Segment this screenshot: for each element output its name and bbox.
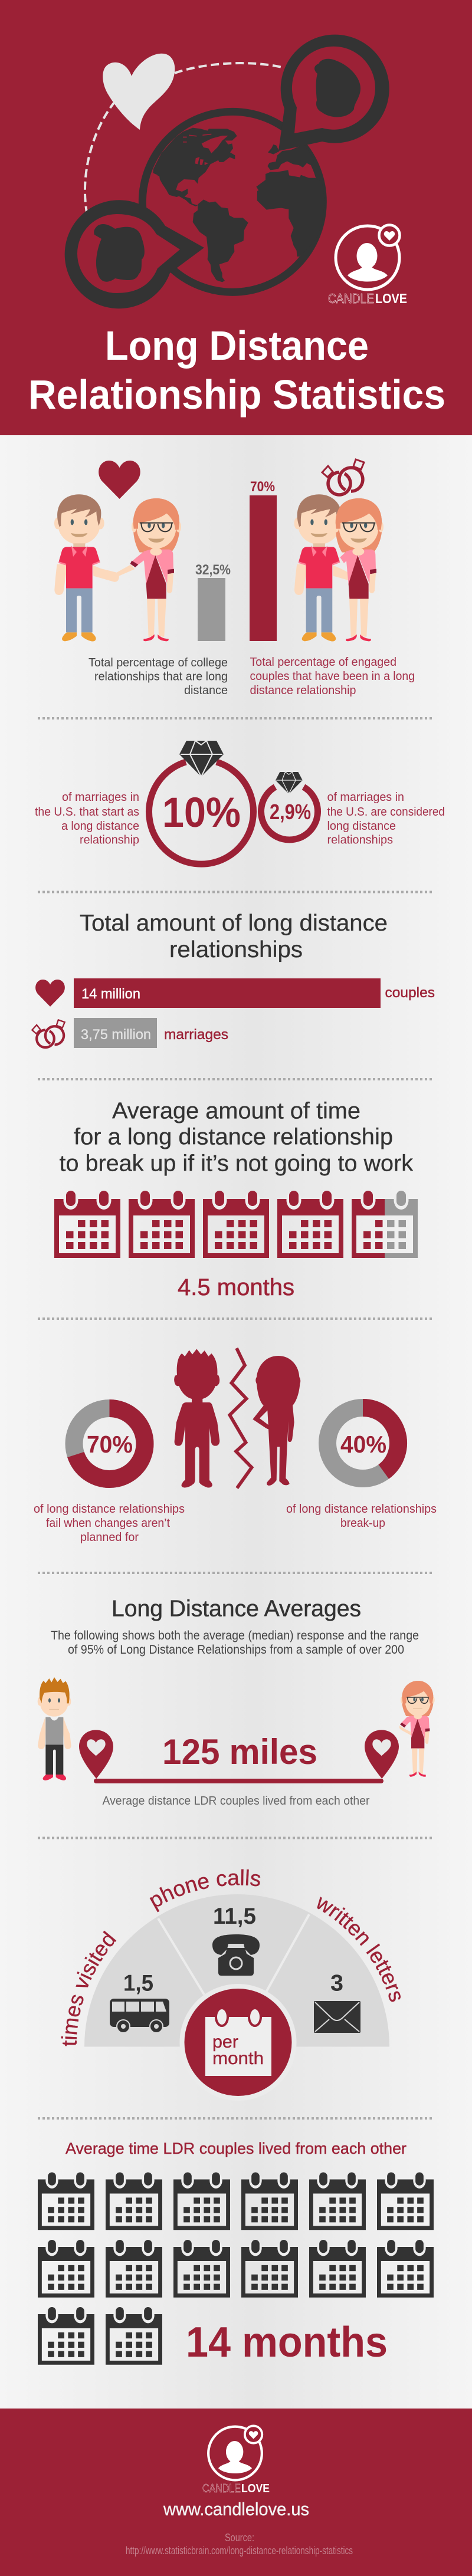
- logo: [328, 225, 407, 306]
- bar: 70%: 70%: [250, 479, 275, 495]
- title: Relationship Statistics: [28, 372, 445, 418]
- dashed flight path: [85, 63, 284, 212]
- text: college relationships: Total percentage of college: [88, 656, 228, 669]
- small man: [38, 1677, 71, 1780]
- logo: LOVE: [375, 291, 407, 306]
- panel: total amount: [32, 911, 435, 1048]
- calendars: 4.5 months: [54, 1191, 418, 1258]
- source: http://www.statisticbrain.com/long-distance-relationship-statistics: [126, 2545, 353, 2557]
- distance line: [94, 1779, 384, 1783]
- icon: wedding rings: [32, 1020, 65, 1047]
- donut: 70%: 70%: [87, 1431, 133, 1458]
- icon: wedding rings: [322, 459, 364, 495]
- icon: envelope: [314, 2001, 360, 2033]
- text: marriages considered long distance: [327, 790, 445, 847]
- intro text: The following shows both the average (median) response and the range: [51, 1629, 419, 1642]
- footer logo: LOVE: [241, 2482, 270, 2495]
- text: marriages start as long distance: a long distance: [61, 819, 139, 833]
- big ring 10%: 10%: [162, 790, 241, 836]
- text: 40% caption: of long distance relationships: [286, 1502, 437, 1516]
- per month badge: per: [212, 2032, 238, 2052]
- text: college relationships: distance: [184, 684, 228, 697]
- icon: heart: [35, 980, 65, 1007]
- icon: telephone: [212, 1934, 260, 1976]
- donut: 70%: [74, 1408, 145, 1479]
- donut: 40%: 40%: [340, 1431, 386, 1458]
- small woman: [399, 1681, 435, 1777]
- icon: heart: [103, 54, 175, 130]
- icon: right pin: [365, 1730, 399, 1779]
- icon: left pin: [79, 1730, 113, 1779]
- text: 70% caption: fail when changes aren’t: [46, 1516, 170, 1530]
- heading: to break up if it’s not going to work: [59, 1151, 413, 1176]
- intro text: of 95% of Long Distance Relationships from a sample of over 200: [68, 1643, 404, 1657]
- panel: per month fan chart: [61, 1869, 401, 2096]
- panel: marriages rings: [35, 741, 445, 864]
- logo: CANDLE: [328, 291, 374, 306]
- icon: crack zigzag: [230, 1348, 252, 1488]
- text: 70% caption: [34, 1502, 185, 1544]
- text: marriages start as long distance: the U.S. that start as: [35, 805, 139, 819]
- couple holding hands: [54, 494, 181, 641]
- text: marriages considered long distance: long distance: [327, 819, 396, 833]
- heading: for a long distance relationship: [74, 1124, 393, 1150]
- bar: 70%: [250, 479, 277, 641]
- heading: [80, 911, 388, 962]
- bar: 14 million couples: couples: [385, 985, 435, 1001]
- caption: Average distance LDR couples lived from each other: [103, 1795, 370, 1808]
- bar: 14 million couples: 14 million: [81, 986, 140, 1002]
- bar: 3,75 million marriages: 3,75 million: [81, 1027, 151, 1043]
- curved label: phone calls: phone calls: [150, 1869, 261, 1912]
- panel: time apart: [38, 2140, 434, 2366]
- value: 4.5 months: 4.5 months: [178, 1274, 294, 1300]
- title: [28, 323, 445, 418]
- icon: top right map pin with head: [278, 35, 389, 151]
- donut: 40%: [327, 1408, 398, 1478]
- value: 1,5: 1,5: [123, 1971, 153, 1996]
- heading: Long Distance Averages: [112, 1596, 361, 1622]
- text: marriages start as long distance: relationship: [80, 833, 139, 847]
- footer logo: CANDLE: [202, 2482, 241, 2495]
- text: college relationships: [88, 656, 228, 697]
- text: college relationships: relationships that are long: [94, 670, 228, 683]
- text: 70% caption: of long distance relationships: [34, 1502, 185, 1516]
- value: 125 miles: 125 miles: [162, 1732, 317, 1772]
- text: engaged couples: [250, 655, 415, 697]
- icon: woman silhouette: [253, 1356, 300, 1486]
- text: 40% caption: [286, 1502, 437, 1530]
- per month badge: [184, 1989, 291, 2096]
- heading: [59, 1098, 413, 1176]
- title: Long Distance: [105, 323, 369, 369]
- panel: footer: [0, 2409, 472, 2576]
- engaged couple: [294, 494, 384, 641]
- heading: Average amount of time: [112, 1098, 360, 1124]
- source: [126, 2532, 353, 2557]
- heading: Total amount of long distance: [80, 911, 388, 936]
- text: marriages start as long distance: [35, 790, 139, 847]
- panel: long distance averages: [38, 1596, 435, 1808]
- footer logo: [202, 2426, 270, 2495]
- panel: college and engaged couples: [54, 459, 415, 697]
- text: marriages considered long distance: the U.S. are considered: [327, 805, 445, 819]
- panel: header: [0, 0, 472, 435]
- small ring 2,9%: [261, 772, 317, 840]
- intro text: [51, 1629, 419, 1657]
- fan sectors: [84, 1894, 389, 2101]
- icon: globe: [142, 111, 327, 292]
- text: engaged couples: couples that have been in a long: [250, 669, 415, 683]
- heading: Average time LDR couples lived from each other: [65, 2140, 407, 2157]
- text: 40% caption: break-up: [340, 1516, 385, 1530]
- website: www.candlelove.us: [163, 2499, 309, 2519]
- text: 70% caption: planned for: [80, 1530, 139, 1544]
- small ring 2,9%: 2,9%: [270, 800, 311, 824]
- big ring 10%: [149, 741, 254, 864]
- curved label: times visited: times visited: [61, 1931, 117, 2046]
- bar: 3,75 million marriages: marriages: [164, 1027, 228, 1043]
- icon: heart above couple: [99, 461, 140, 499]
- icon: bottom left map pin with head: [65, 200, 204, 308]
- per month badge: month: [212, 2049, 264, 2068]
- value: 14 months: 14 months: [186, 2319, 388, 2366]
- bar: 32,5%: [195, 562, 231, 641]
- text: marriages considered long distance: relationships: [327, 833, 393, 847]
- panel: break ups: [34, 1348, 437, 1544]
- text: marriages considered long distance: of marriages in: [327, 790, 404, 804]
- bar: 32,5%: 32,5%: [195, 562, 231, 578]
- text: marriages start as long distance: of marriages in: [62, 790, 139, 804]
- value: 11,5: 11,5: [213, 1904, 256, 1929]
- bar: 3,75 million marriages: [74, 1018, 228, 1048]
- icon: bus: [110, 1999, 169, 2033]
- calendars: 14 months: [38, 2173, 434, 2365]
- icon: man silhouette: [174, 1349, 219, 1487]
- heading: relationships: [169, 937, 303, 962]
- curved label: written letters: written letters: [317, 1897, 401, 2002]
- text: engaged couples: distance relationship: [250, 684, 356, 697]
- value: 3: 3: [330, 1971, 343, 1996]
- panel: time to break up: [54, 1098, 418, 1300]
- bar: 14 million couples: [74, 978, 435, 1008]
- source: Source:: [225, 2532, 254, 2544]
- text: engaged couples: Total percentage of engaged: [250, 655, 396, 669]
